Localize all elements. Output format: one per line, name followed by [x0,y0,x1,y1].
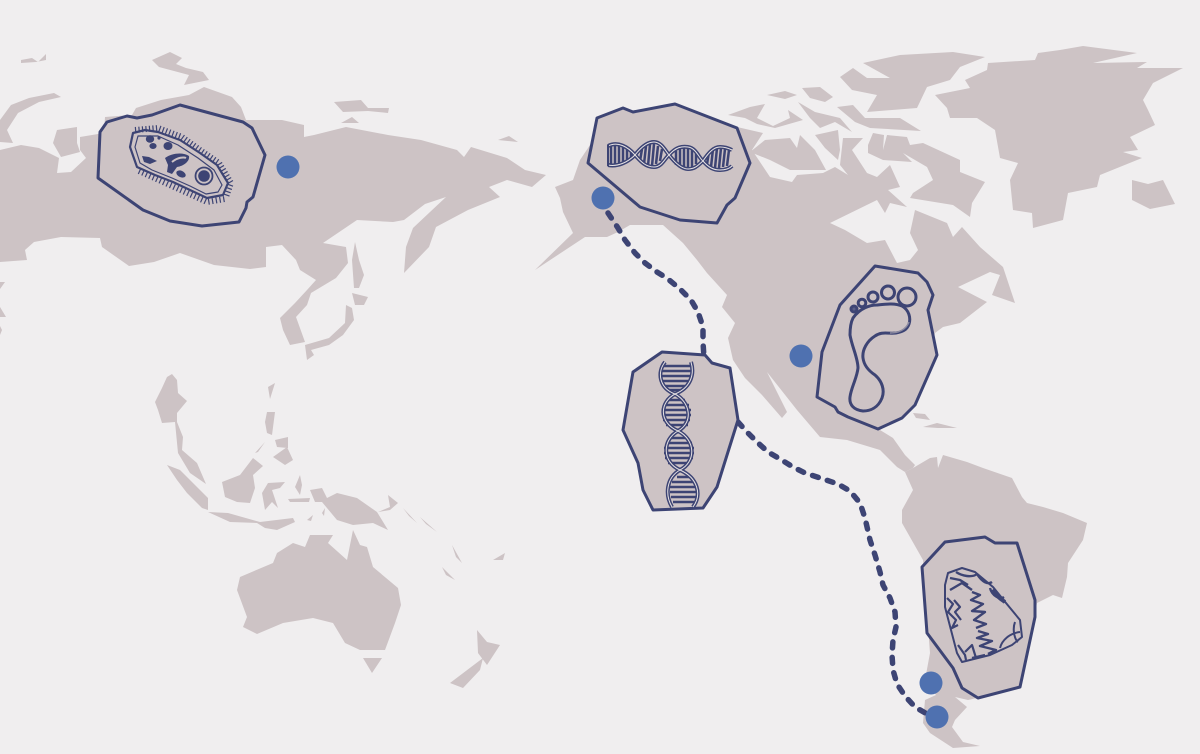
landmass: Japan and Sakhalin [305,242,368,360]
landmass: Greenland [935,46,1183,228]
landmass: New Zealand [450,630,500,688]
icon: vertical DNA helix [660,362,698,507]
landmass: Southeast Asia and Indonesia [155,374,325,530]
icon: microbe [130,128,231,202]
panel: stone tool fossil [922,537,1035,698]
panel: footprint fossil [817,266,937,429]
landmass: Caribbean islands [913,413,957,428]
landmass: South America [902,455,1087,748]
landmass: Finland [53,127,80,157]
route: dashed migration path [608,213,927,714]
dot: southern Chile upper [920,672,942,694]
landmass: Arctic Canada islands [728,52,985,170]
landmass: Baffin Island [868,133,985,217]
site marker dots [276,156,948,728]
icon: stone tool [945,568,1022,662]
landmass: left edge fragments [0,282,6,335]
landmass: Scandinavia [0,93,61,143]
dot: Alaska [592,186,614,210]
landmass: Eurasia [0,87,546,345]
dot: southern Chile lower [926,706,948,728]
icon: footprint [850,286,916,411]
panel: vertical DNA fossil [623,352,738,510]
panel: horizontal DNA fossil [588,104,750,223]
landmass: Iceland [1132,180,1175,209]
landmass: New Guinea and Pacific islands [310,488,505,580]
landmass: Arctic islands of Russia [21,52,518,142]
dot: North America [790,344,812,368]
landmass: Australia and Tasmania [237,530,401,673]
panel: microbe fossil [98,105,265,226]
icon: horizontal DNA helix [608,142,732,170]
landmass: North America [535,120,1015,472]
dot: Siberia [276,156,300,178]
